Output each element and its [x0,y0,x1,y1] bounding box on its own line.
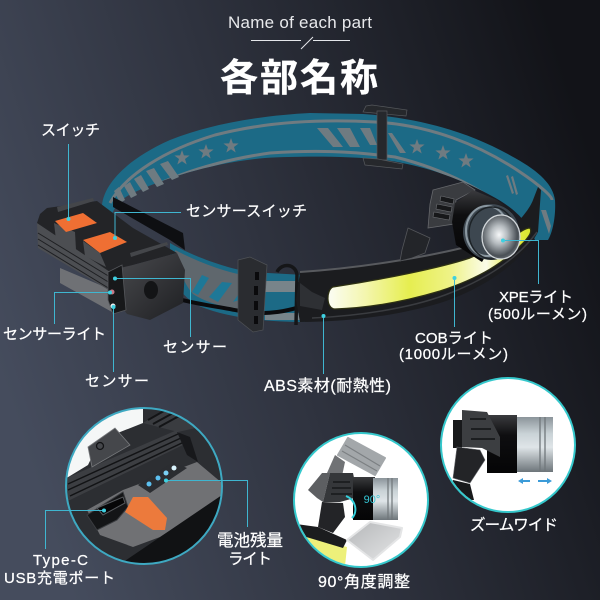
heading: english subtitle: Name of each part [228,13,372,32]
callout: ABS material: ABS素材(耐熱性) [264,377,391,395]
top strap buckle [363,105,407,169]
sensor switch button [83,232,127,267]
detail circle: 90 degree angle: 90° [364,494,380,506]
callout: ABS material [264,314,391,395]
title: 各部名称 [220,58,380,100]
callout: sensor right: センサー [163,339,227,356]
caption: zoom wide: ズームワイド [470,516,558,534]
switch button [54,213,97,250]
battery top face [37,201,177,272]
callout: XPE light: (500ルーメン) [488,306,587,323]
COB light [328,228,531,309]
callout: COB light: (1000ルーメン) [399,346,508,363]
battery level panel [138,466,187,493]
lamp arm [400,228,430,261]
callout: type-c port: Type-C [33,552,88,569]
top ridges [57,198,168,257]
front black band [296,187,541,322]
headlamp illustration [37,105,555,332]
callout: battery level light: ライト [228,551,272,568]
callout: XPE light: XPEライト [499,289,573,306]
cable socket [144,281,158,299]
strap side buckle [238,257,297,332]
detail circle: zoom wide [441,378,575,512]
heading divider [251,37,350,49]
headband: rear strap [102,113,555,240]
caption: 90 degree adjustment: 90°角度調整 [318,573,410,591]
callout: battery level light: 電池残量 [217,531,283,550]
callout: type-c port [4,508,115,587]
callout: switch: スイッチ [41,122,100,139]
battery bracket [60,268,112,312]
callout: sensor right [113,276,227,356]
callout: XPE light [488,238,587,323]
lamp lens [457,198,525,266]
battery side face [37,223,112,292]
headband: front-left strap [170,243,305,322]
callout: sensor lower: センサー [85,373,149,390]
cable [148,287,320,313]
callout: sensor light [3,290,112,343]
callout: COB light: COBライト [415,330,493,347]
callout: battery level light [164,478,283,568]
strap stripes and stars [114,128,551,234]
callout: sensor switch [113,203,307,240]
zoom arrows [518,478,552,484]
callout: sensor lower [85,305,149,390]
strap clip at band end [300,283,325,310]
detail circle: charging port [65,407,223,565]
right end face [116,253,185,320]
callout: type-c port: USB充電ポート [4,570,115,587]
callout: COB light [399,276,508,363]
sensor strip [108,265,126,314]
usb cap [125,497,167,530]
lamp head housing [428,182,512,262]
detail circle: 90 degree angle [294,433,428,567]
battery box [37,198,185,320]
callout: sensor light: センサーライト [3,326,106,343]
callout: sensor switch: センサースイッチ [186,203,307,220]
strap plate behind battery [113,197,185,250]
callout: switch [41,122,100,221]
